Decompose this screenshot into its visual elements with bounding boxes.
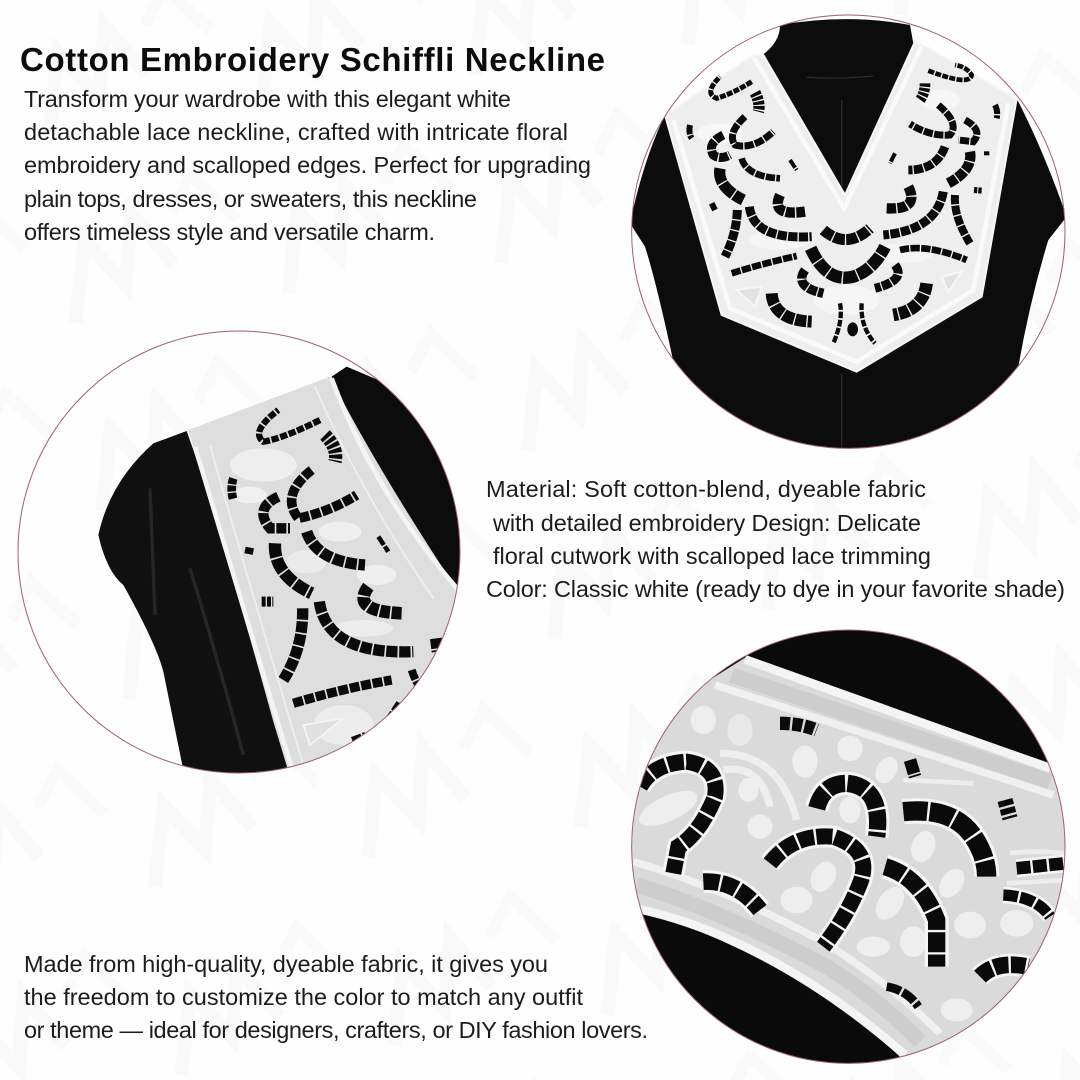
mannequin body <box>630 19 1067 453</box>
panel: side view of neckline <box>18 331 477 778</box>
mannequin body <box>98 431 293 778</box>
text block: product introduction: detachable lace neckline, crafted with intricate floral <box>24 119 568 145</box>
text block: material, design and color: Material: Soft cotton-blend, dyeable fabric <box>486 476 926 502</box>
text block: product introduction: embroidery and scalloped edges. Perfect for upgrading <box>24 152 591 178</box>
text block: material, design and color: with detailed embroidery Design: Delicate <box>492 510 921 536</box>
center dot <box>847 322 858 336</box>
text block: customization note <box>24 951 648 1043</box>
text block: customization note: or theme — ideal for designers, crafters, or DIY fashion lovers. <box>24 1017 648 1043</box>
text block: customization note: Made from high-quality, dyeable fabric, it gives you <box>24 951 548 977</box>
lace collar <box>665 42 1017 372</box>
panel: front view of neckline on mannequin <box>630 15 1067 453</box>
text block: customization note: the freedom to customize the color to match any outfit <box>24 984 583 1010</box>
lace band <box>188 377 458 777</box>
text block: material, design and color <box>486 476 1065 602</box>
text block: product introduction: Transform your wardrobe with this elegant white <box>24 86 511 112</box>
text block: product introduction: plain tops, dresses, or sweaters, this neckline <box>24 186 477 212</box>
text block: material, design and color: floral cutwork with scalloped lace trimming <box>493 543 931 569</box>
title: Cotton Embroidery Schiffli Neckline <box>20 41 605 78</box>
cutwork pattern <box>640 723 1065 1007</box>
cutwork pattern <box>232 410 438 743</box>
text block: product introduction: offers timeless style and versatile charm. <box>24 219 435 245</box>
text block: product introduction <box>24 86 591 245</box>
lace band close-up <box>620 657 1080 1060</box>
stitched outlines <box>640 762 1065 977</box>
cutwork pattern <box>689 65 997 343</box>
text block: material, design and color: Color: Classic white (ready to dye in your favorite shade) <box>486 576 1065 602</box>
panel: close-up of embroidery <box>631 630 1066 1064</box>
